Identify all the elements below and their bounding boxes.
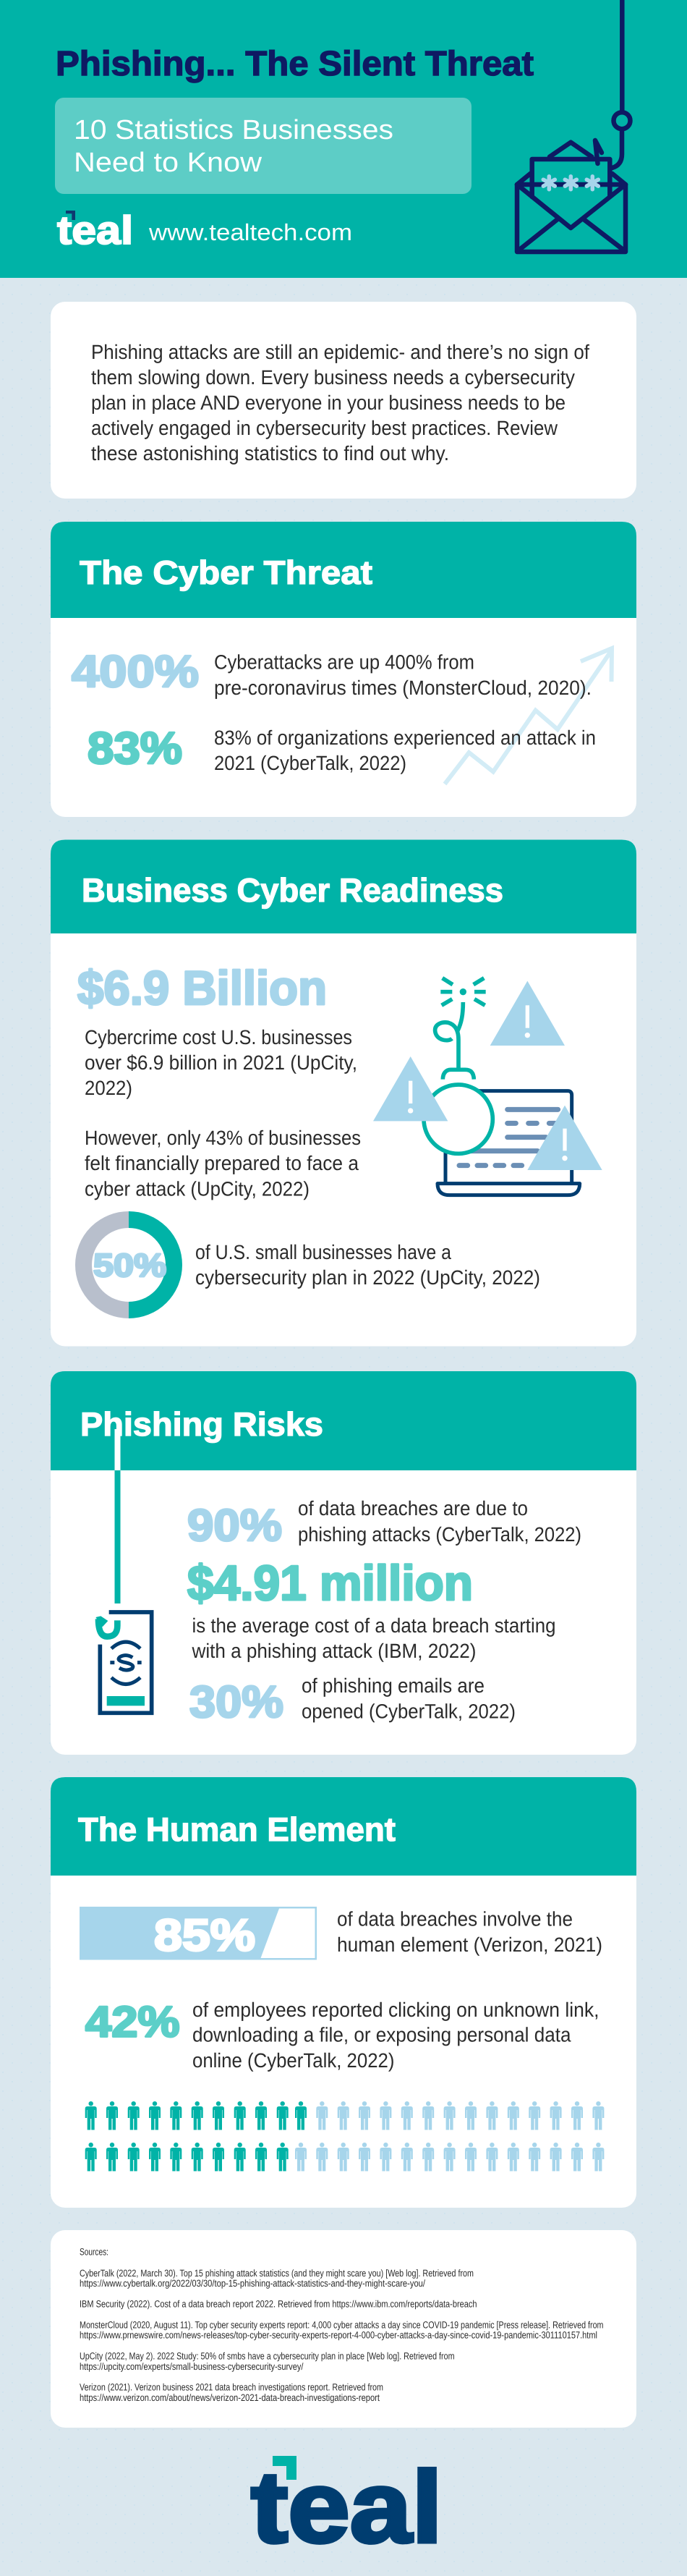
sources text: CyberTalk (2022, March 30). Top 15 phishing attack statistics (and they might scare you) [Web log]. Retrieved from [80,2268,474,2279]
text: cybercrime cost: 2022) [85,1077,132,1099]
logo: small teal wordmark: teal [57,208,133,253]
stat: 30%: 30% [189,1677,283,1727]
stat: 83%: 83% [88,724,182,774]
text: financially prepared: However, only 43% of businesses [85,1127,361,1149]
donut chart: 50%: 50% [93,1247,166,1284]
text: data breaches: phishing attacks (CyberTalk, 2022) [298,1523,581,1546]
donut chart: 50% [84,1220,174,1310]
stat text: organizations [214,726,596,774]
text: cybercrime cost: over $6.9 billion in 2021 (UpCity, [85,1051,357,1074]
text: cybercrime cost [85,1026,357,1099]
text: cybercrime cost: Cybercrime cost U.S. businesses [85,1026,352,1048]
panel: introduction [51,302,636,499]
stat: 90%: 90% [187,1501,282,1551]
stat: $4.91 million: $4.91 million [187,1556,473,1611]
text: cybersecurity plan: cybersecurity plan in 2022 (UpCity, 2022) [195,1266,540,1289]
text: phishing emails: of phishing emails are [302,1674,485,1697]
sources text: https://www.verizon.com/about/news/verizon-2021-data-breach-investigations-report [80,2392,380,2403]
text: employees: online (CyberTalk, 2022) [192,2049,395,2072]
website url: www.tealtech.com [148,219,352,245]
text: cybersecurity plan [195,1241,540,1289]
text: average cost: is the average cost of a data breach starting [192,1614,555,1637]
intro text: these astonishing statistics to find out why. [91,442,449,465]
text: phishing emails: opened (CyberTalk, 2022) [302,1700,516,1722]
intro text: plan in place AND everyone in your business needs to be [91,391,566,414]
stat text: cyberattacks: Cyberattacks are up 400% from [214,651,474,673]
heading: The Cyber Threat [80,554,372,591]
progress bar: 85%: 85% [154,1910,255,1961]
text: financially prepared: cyber attack (UpCity, 2022) [85,1178,310,1200]
text: human element: human element (Verizon, 2021) [337,1933,602,1956]
title: Phishing... The Silent Threat [56,45,534,83]
stat text: cyberattacks [214,651,592,699]
sources text: IBM Security (2022). Cost of a data breach report 2022. Retrieved from https://www.ibm.com/reports/data-breach [80,2298,477,2310]
intro text: actively engaged in cybersecurity best practices. Review [91,417,558,439]
logo: teal footer wordmark: teal [251,2450,443,2564]
panel: sources [51,2230,636,2428]
heading: The Human Element [78,1810,396,1848]
text: data breaches [298,1497,581,1546]
text: human element: of data breaches involve the [337,1907,573,1931]
intro text: them slowing down. Every business needs a cybersecurity [91,366,575,389]
text: average cost: with a phishing attack (IBM, 2022) [192,1640,476,1662]
stat text: cyberattacks: pre-coronavirus times (MonsterCloud, 2020). [214,677,592,699]
sources text: Verizon (2021). Verizon business 2021 data breach investigations report. Retrieved from [80,2382,383,2392]
text: financially prepared [85,1127,361,1200]
icon: bomb, laptop and warning triangles [373,978,602,1195]
text: financially prepared: felt financially prepared to face a [85,1152,359,1174]
progress bar: 85% [80,1907,317,1961]
heading: Phishing Risks [80,1405,323,1443]
text: employees: downloading a file, or exposing personal data [192,2023,571,2046]
text: employees [192,1999,599,2072]
panel: phishing risks [51,1371,636,1755]
sources text: https://upcity.com/experts/small-business-cybersecurity-survey/ [80,2361,304,2372]
stat: 400%: 400% [72,647,199,697]
text: human element [337,1907,602,1956]
intro text [91,341,589,465]
text: data breaches: of data breaches are due to [298,1497,528,1520]
icon: fish hook with envelope [517,0,631,252]
subtitle box [55,98,471,194]
text: phishing emails [302,1674,516,1722]
stat text: organizations: 2021 (CyberTalk, 2022) [214,752,406,774]
panel: the cyber threat [51,522,636,817]
subtitle box: Need to Know [74,148,263,178]
subtitle box: 10 Statistics Businesses [74,115,393,145]
intro text: Phishing attacks are still an epidemic- and there’s no sign of [91,341,589,363]
stat text: organizations: 83% of organizations experienced an attack in [214,726,596,749]
heading: Business Cyber Readiness [82,871,503,909]
icon: hook with dollar bill [95,1429,152,1713]
pictogram: people row 1 [85,2101,604,2130]
sources text: https://www.cybertalk.org/2022/03/30/top-15-phishing-attack-statistics-and-they-might-scare-you/ [80,2278,425,2289]
stat: $6.9 billion: $6.9 Billion [77,961,327,1014]
sources text [80,2246,603,2403]
text: average cost [192,1614,555,1662]
stat: 42%: 42% [85,1997,179,2046]
sources text: Sources: [80,2246,108,2258]
header banner [0,0,687,278]
panel: business cyber readiness [51,839,636,1346]
icon: rising trend arrow [445,648,612,784]
text: employees: of employees reported clicking on unknown link, [192,1999,599,2021]
text: cybersecurity plan: of U.S. small businesses have a [195,1241,451,1263]
sources text: UpCity (2022, May 2). 2022 Study: 50% of smbs have a cybersecurity plan in place [Web log]. Retrieved from [80,2350,454,2362]
pictogram: people row 2 [85,2143,604,2171]
panel: the human element [51,1777,636,2208]
